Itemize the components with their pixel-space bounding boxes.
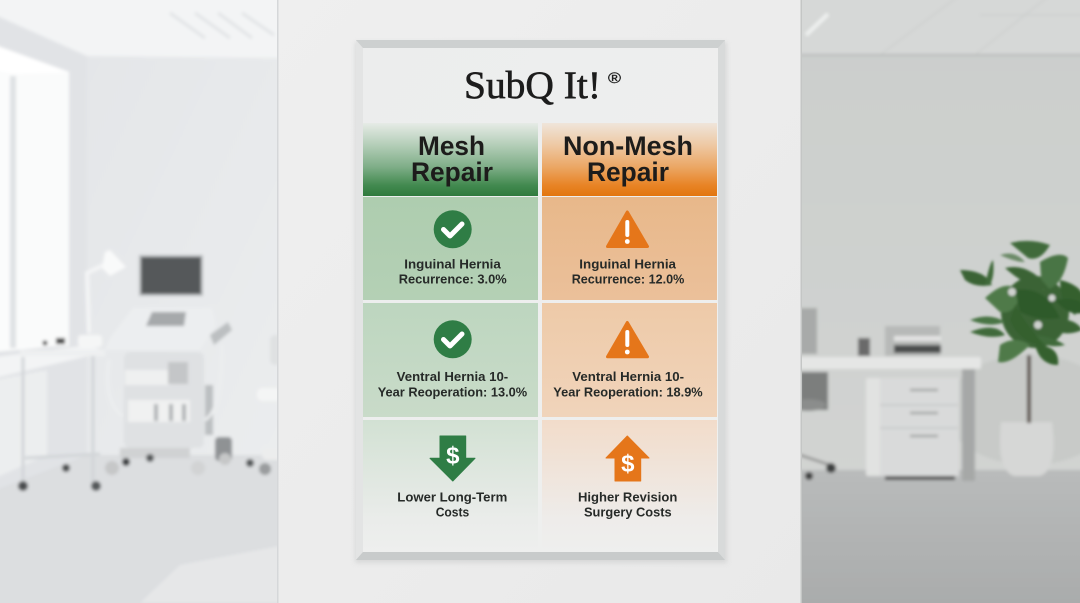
icon: up arrow with dollar [606,436,649,481]
non-mesh header [542,123,717,196]
ceiling left [0,0,285,58]
mesh header: Mesh [418,131,485,161]
cell: ventral mesh: Year Reoperation: 13.0% [378,384,528,399]
icon: orange warning [608,322,648,357]
panel: mesh repair column [363,123,538,552]
cell: higher costs: Surgery Costs [584,505,672,520]
center wall [277,0,802,603]
cell: inguinal non-mesh: Inguinal Hernia [579,256,677,272]
poster paper [363,48,718,552]
icon: green check [434,320,472,358]
frame [356,40,725,560]
icon: down arrow with dollar [430,436,475,481]
desk items [858,338,870,356]
lamp [87,262,110,333]
ultrasound machine [105,308,216,350]
floor [0,455,285,603]
drawers [866,378,959,476]
framed poster [355,40,727,563]
cell: ventral non-mesh: Year Reoperation: 18.9% [553,384,703,399]
cell: higher costs: Higher Revision [578,490,677,505]
background photo: left clinic room [0,0,285,603]
mesh header: Repair [411,157,493,187]
cell: inguinal non-mesh [542,197,717,300]
side table [23,355,100,485]
sill and radiator [0,345,105,378]
cell: inguinal mesh [363,197,538,300]
left wall and window [0,15,87,490]
cell: inguinal mesh: Recurrence: 3.0% [399,272,507,286]
cell: ventral non-mesh [542,303,717,417]
mesh header [363,123,538,196]
cell: inguinal mesh: Inguinal Hernia [404,256,502,272]
monitor [139,255,203,296]
cell: ventral mesh [363,303,538,417]
icon: down arrow with dollar: $ [446,442,460,470]
title logo: ® [608,70,621,87]
cell: inguinal non-mesh: Recurrence: 12.0% [572,272,685,286]
planter [1000,422,1054,476]
title logo: SubQ It! [464,64,601,107]
floor right [795,470,1080,603]
background photo: plant leaves [960,241,1080,365]
cell: ventral non-mesh: Ventral Hernia 10- [572,369,684,384]
icon: up arrow with dollar: $ [621,450,635,478]
stool [257,388,281,401]
icon: orange warning [608,212,648,246]
desk [798,357,981,369]
cell: lower costs: Lower Long-Term [397,490,507,505]
frame shadow [355,42,727,563]
non-mesh header: Non-Mesh [563,131,693,161]
panel: non-mesh repair column [542,123,717,552]
cell: lower costs: Costs [436,505,469,520]
cell: lower costs [363,420,538,552]
background photo: right office room [790,0,1080,603]
chair [800,308,817,354]
cell: ventral mesh: Ventral Hernia 10- [397,369,508,384]
non-mesh header: Repair [587,157,669,187]
ceiling right [795,0,1080,56]
icon: green check [434,210,472,248]
cell: higher costs [542,420,717,552]
